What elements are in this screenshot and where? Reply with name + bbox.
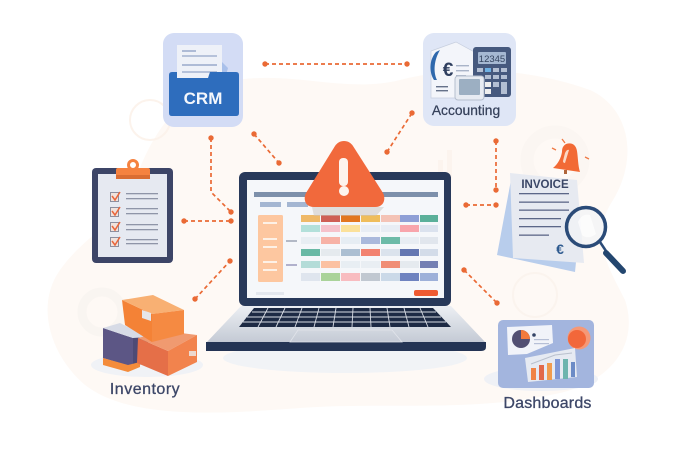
connector: invoice to laptop — [463, 202, 499, 208]
icon: alarm bell — [552, 139, 589, 174]
icon: invoice with magnifier and bell: € — [556, 241, 564, 257]
connector: Accounting to laptop — [384, 110, 415, 155]
icon: Accounting tile: € — [443, 60, 454, 81]
connector: CRM to laptop side — [208, 135, 234, 215]
connector: CRM to laptop warning — [251, 131, 282, 166]
background blob — [48, 71, 629, 413]
connector: CRM to Accounting — [262, 61, 410, 67]
icon: checklist clipboard — [92, 160, 173, 263]
warning triangle — [305, 141, 384, 216]
table cells — [301, 215, 438, 281]
label: CRM: CRM — [184, 89, 222, 108]
connector: invoice vertical — [493, 138, 499, 193]
icon: dashboards tile — [498, 320, 594, 412]
laptop — [206, 172, 486, 351]
icon: inventory boxes — [103, 295, 197, 398]
icon: Accounting tile — [423, 33, 516, 126]
screen spreadsheet — [254, 192, 438, 296]
connector: dashboards to laptop — [461, 267, 500, 306]
label: Inventory: Inventory — [110, 381, 180, 398]
icon: Accounting tile: 12345 — [479, 54, 505, 65]
label: Accounting: Accounting — [432, 103, 500, 118]
connector: checklist to laptop — [181, 218, 234, 224]
icon: magnifying glass — [566, 208, 623, 271]
keyboard — [239, 308, 451, 327]
icon: invoice with magnifier and bell — [497, 139, 623, 272]
icon: CRM folder — [163, 33, 243, 127]
connector: inventory to laptop — [192, 258, 233, 302]
label: INVOICE: INVOICE — [521, 179, 569, 191]
label: Dashboards: Dashboards — [503, 395, 592, 412]
